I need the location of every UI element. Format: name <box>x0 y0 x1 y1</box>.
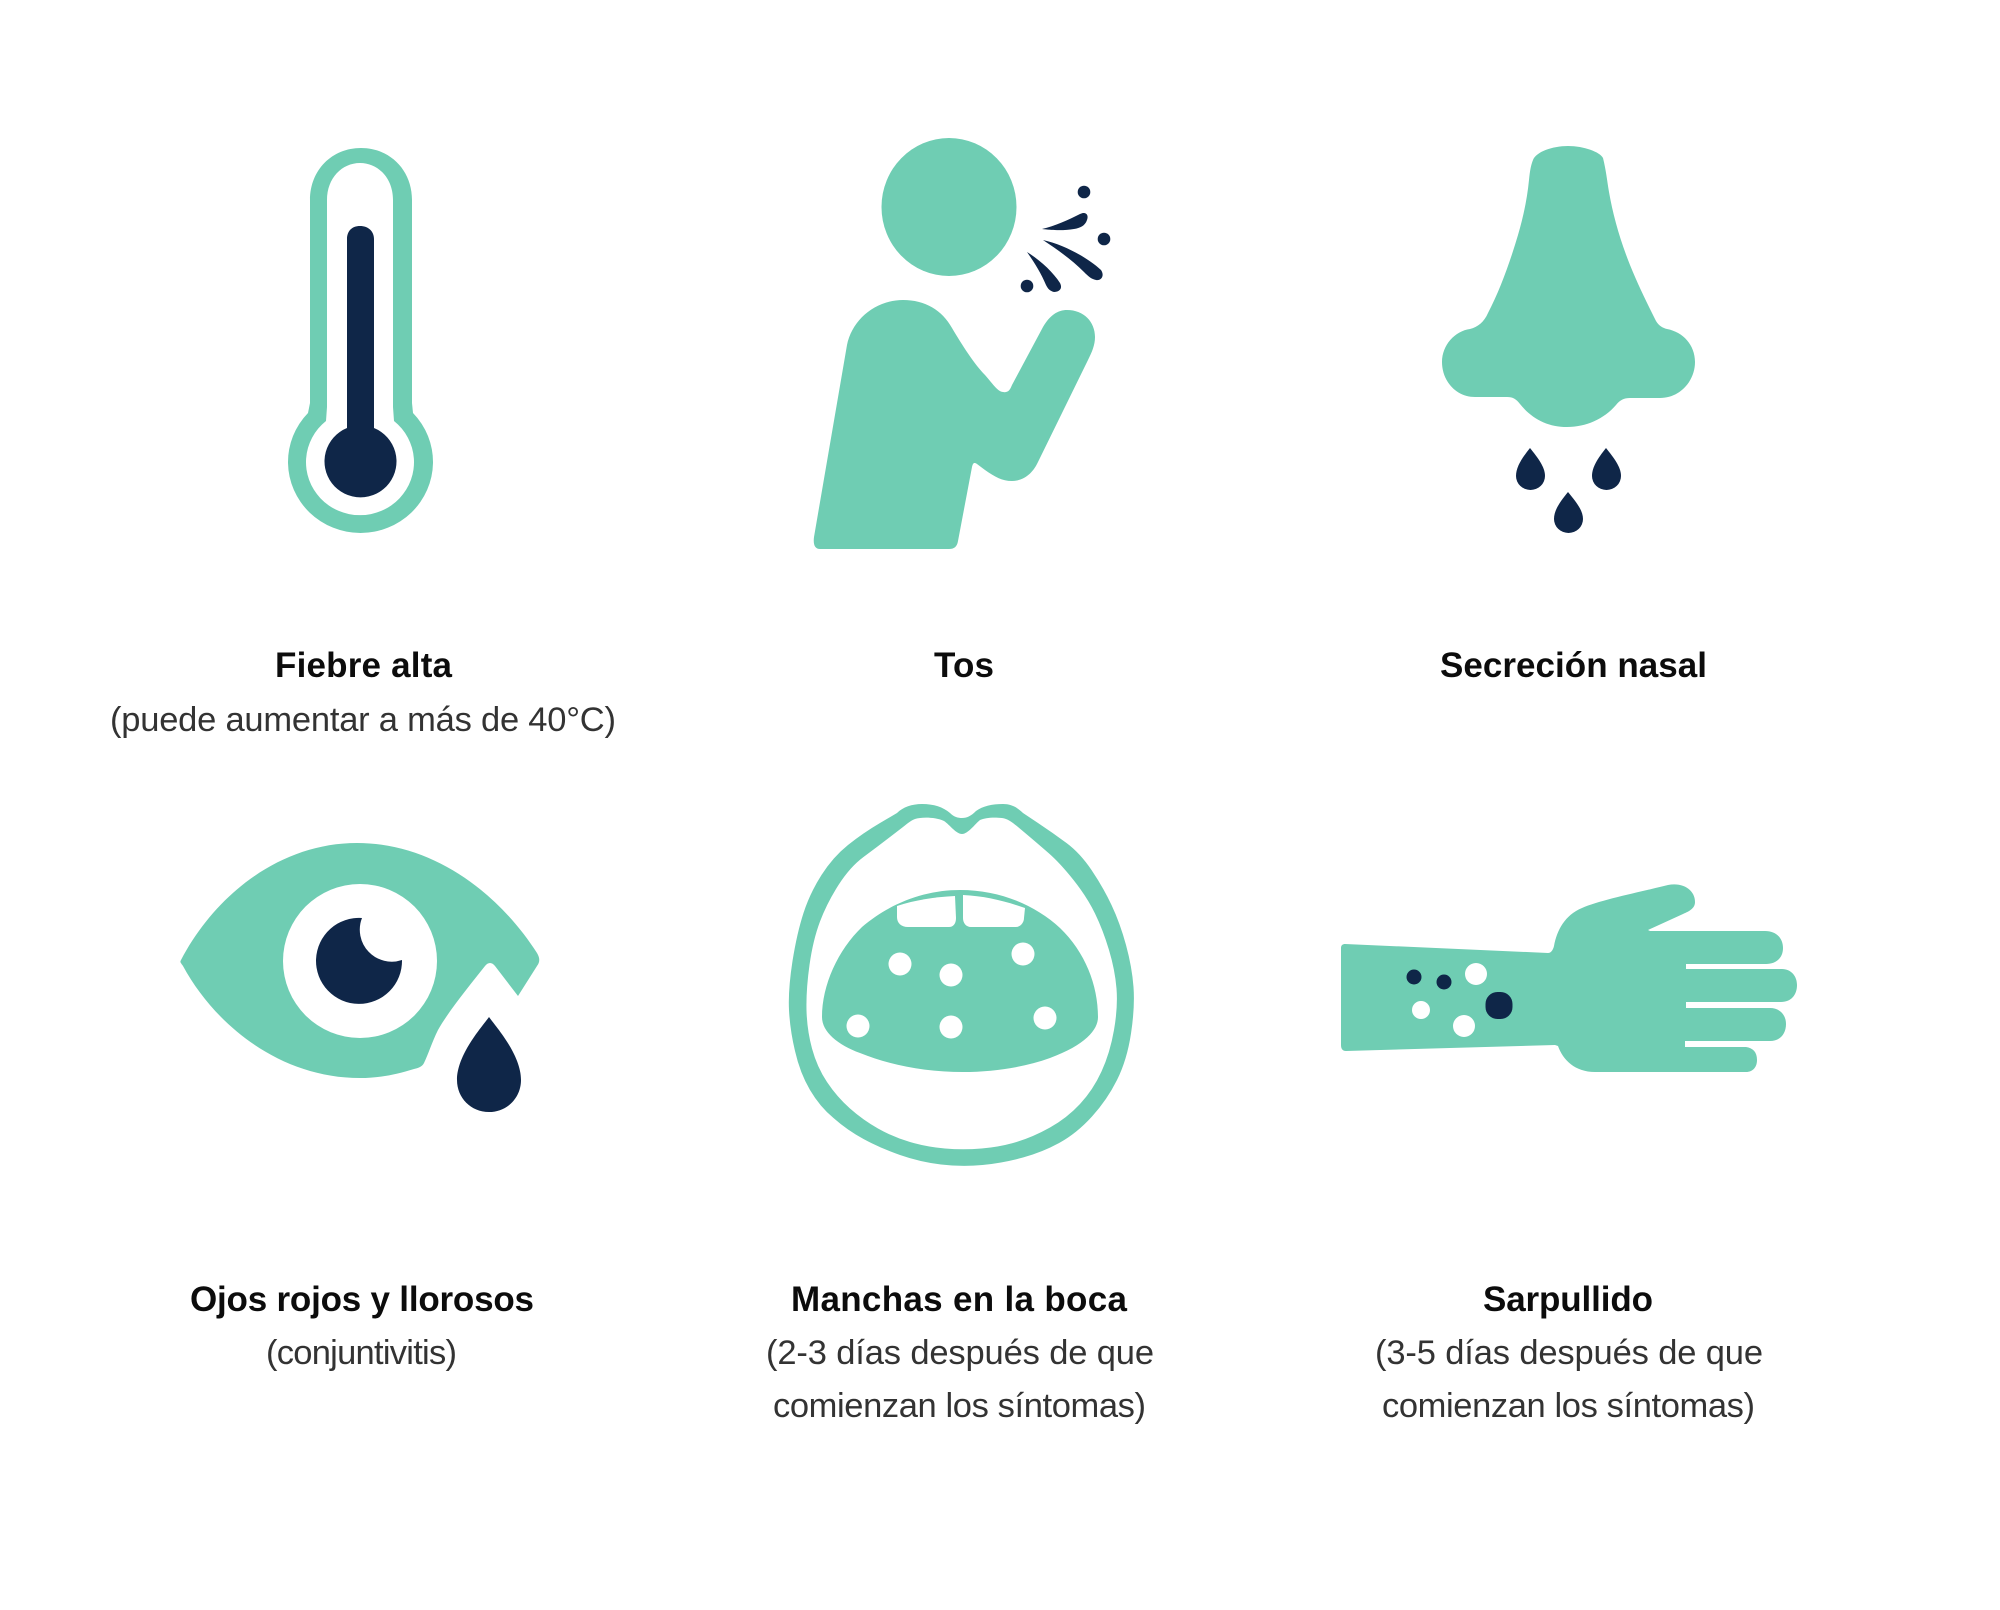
text: sarpullido detail: comienzan los síntomas) <box>1382 1387 1755 1425</box>
panel: sarpullido <box>1341 884 1797 1425</box>
icon: open mouth with spots <box>789 804 1134 1166</box>
text: manchas detail: comienzan los síntomas) <box>773 1387 1146 1425</box>
text: manchas detail: (2-3 días después de que <box>766 1334 1154 1372</box>
text: manchas detail <box>766 1334 1154 1425</box>
icon: thermometer <box>288 148 433 533</box>
heading: ojos rojos y llorosos: Ojos rojos y llorosos <box>190 1280 534 1319</box>
panel: manchas en la boca <box>766 804 1154 1425</box>
icon: arm with rash <box>1341 884 1797 1072</box>
text: sarpullido detail <box>1375 1334 1763 1425</box>
icon: coughing person <box>814 138 1110 549</box>
icon: nose with drops <box>1442 146 1695 533</box>
text: sarpullido detail: (3-5 días después de que <box>1375 1334 1763 1372</box>
panel: tos <box>814 138 1110 685</box>
heading: tos: Tos <box>934 646 994 685</box>
text: conjuntivitis: (conjuntivitis) <box>266 1334 457 1372</box>
heading: secrecion nasal: Secreción nasal <box>1440 646 1707 685</box>
icon: teary eye <box>180 843 539 1112</box>
heading: sarpullido: Sarpullido <box>1483 1280 1653 1319</box>
panel: fiebre alta <box>110 148 616 739</box>
panel: secrecion nasal <box>1440 146 1707 685</box>
heading: manchas en la boca: Manchas en la boca <box>791 1280 1128 1319</box>
panel: ojos rojos <box>180 843 539 1372</box>
heading: fiebre alta: Fiebre alta <box>275 646 453 685</box>
text: fiebre detail: (puede aumentar a más de 40°C) <box>110 701 616 739</box>
